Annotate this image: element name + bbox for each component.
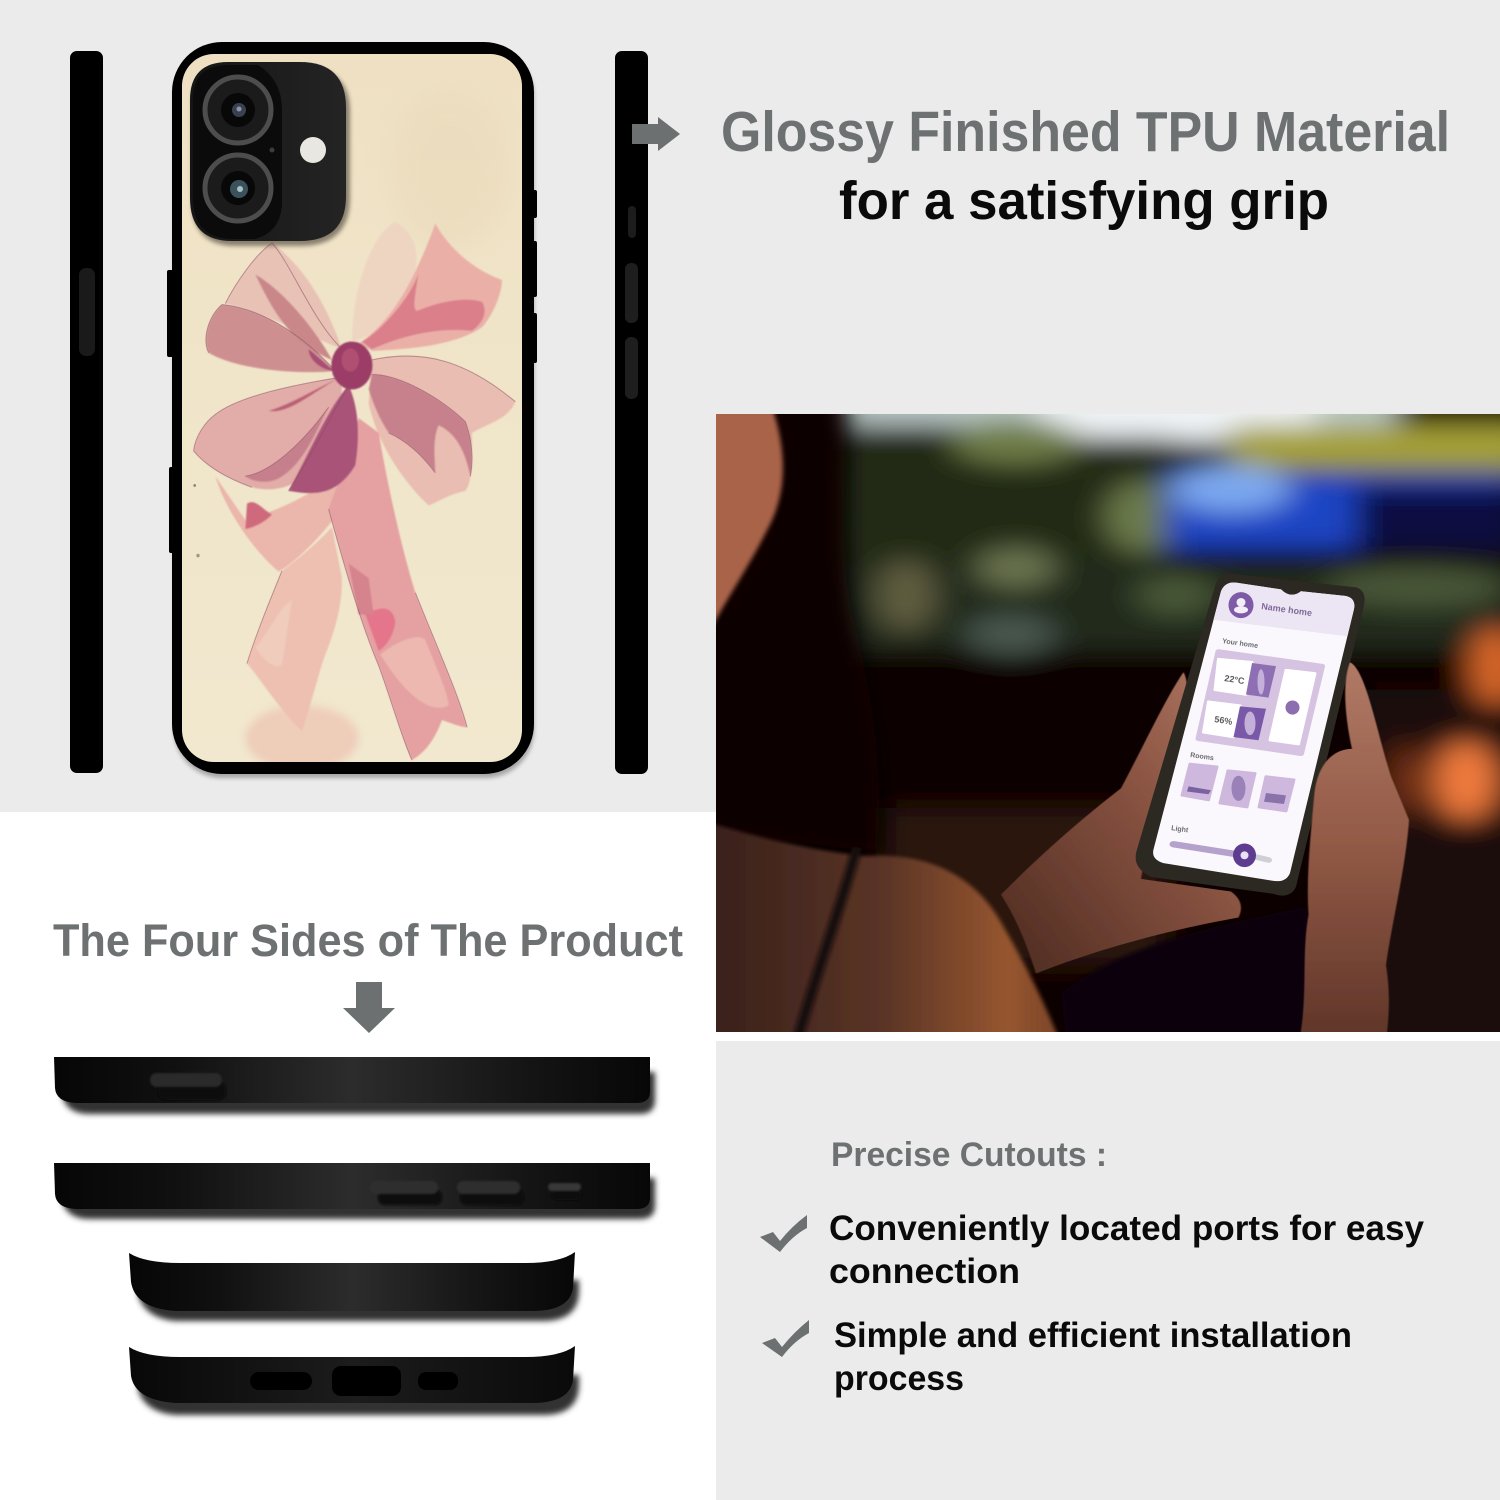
dress strap (796, 847, 857, 1044)
light slider (1174, 844, 1238, 854)
photo: person holding phone (716, 414, 1500, 1032)
room icons (1182, 764, 1217, 800)
screen labels: 22°C (1224, 673, 1246, 686)
feature 2 text: process (834, 1359, 964, 1398)
screen labels (1171, 601, 1313, 834)
camera lens top (205, 77, 271, 143)
heading: glossy finished (721, 100, 1450, 231)
upper-left back loop (225, 243, 342, 349)
screen (1153, 582, 1354, 882)
upper-left front loop (206, 305, 335, 372)
lower-left flap (215, 476, 339, 572)
check icon 2 (762, 1320, 809, 1357)
feature 1 text (829, 1209, 1425, 1291)
person shoulder (706, 822, 1061, 1044)
background panel: top right (716, 0, 1500, 414)
long ribbon left (247, 527, 342, 731)
background panel: top left (0, 0, 716, 812)
person hair (809, 414, 884, 851)
side view strip 1 (54, 1057, 655, 1114)
check icon 1 (760, 1215, 807, 1252)
feature 1 text: connection (829, 1252, 1020, 1291)
heading: glossy finished: for a satisfying grip (839, 171, 1329, 231)
feature 1 text: Conveniently located ports for easy (829, 1209, 1425, 1248)
background panel: precise cutouts (716, 1041, 1500, 1500)
dark top lower (1062, 908, 1307, 1032)
home card (1198, 652, 1322, 754)
paint specks (193, 484, 196, 487)
arrow: right pointing (632, 117, 680, 151)
screen labels: Name home (1261, 601, 1313, 618)
cutouts text block (760, 1136, 1425, 1398)
blurred landscape (831, 414, 1500, 1032)
center dark gather (289, 385, 358, 493)
right side view of case (615, 51, 648, 774)
phone case: back view (167, 42, 537, 778)
screen header (1214, 582, 1354, 636)
feature 2 text: Simple and efficient installation (834, 1316, 1352, 1355)
feature 2 text (834, 1316, 1352, 1398)
cutouts heading: Precise Cutouts : (831, 1136, 1107, 1174)
paint wash (245, 705, 359, 771)
left lower loop (194, 378, 342, 489)
flash (270, 137, 326, 163)
right lower loop (369, 356, 515, 505)
screen labels: Your home (1222, 638, 1258, 650)
case black frame (172, 42, 534, 774)
right hand (1298, 662, 1409, 1044)
bow crease lines (194, 243, 515, 760)
person neck (716, 414, 786, 626)
side view strip 3 (129, 1252, 579, 1321)
left hand (1001, 672, 1241, 973)
left side view of case (70, 51, 103, 773)
screen labels: Light (1171, 825, 1189, 834)
case shadow (174, 48, 534, 778)
top middle loop (352, 222, 417, 342)
side view strip 2 (54, 1163, 655, 1219)
side view strip 4 (129, 1346, 579, 1415)
top right loop (359, 224, 502, 351)
bow artwork (182, 54, 522, 771)
case side buttons (167, 190, 537, 553)
heading: four sides: The Four Sides of The Product (53, 915, 683, 966)
screen labels: Rooms (1190, 752, 1214, 762)
heading: glossy finished: Glossy Finished TPU Material (721, 100, 1450, 164)
phone in hand (1136, 572, 1371, 899)
camera lens bottom (205, 155, 271, 221)
arrow: down pointing (343, 982, 395, 1033)
long ribbon right (329, 418, 467, 760)
screen labels: 56% (1214, 714, 1233, 727)
knot (331, 341, 373, 389)
camera island (190, 62, 350, 246)
